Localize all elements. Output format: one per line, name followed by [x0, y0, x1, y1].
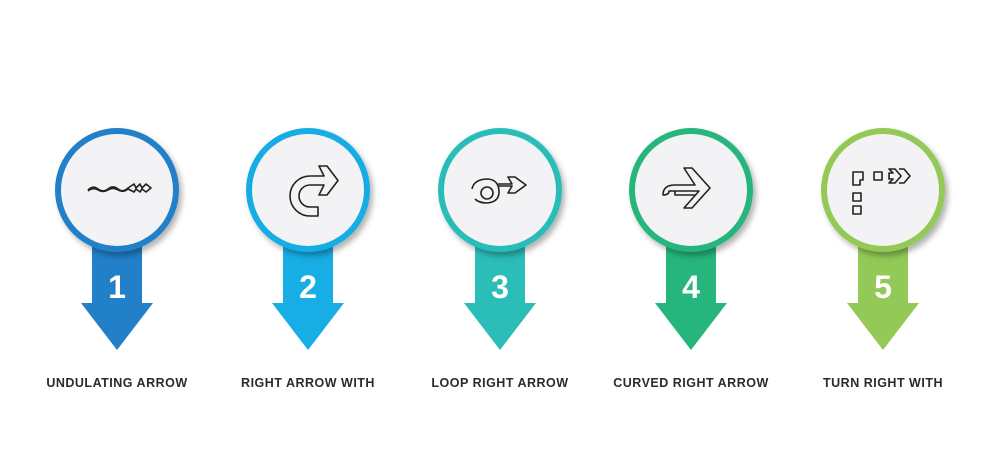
step 5	[821, 128, 945, 390]
icon: loop right arrow	[472, 177, 526, 203]
icon: curved right arrow	[663, 168, 710, 208]
circle 2	[246, 128, 370, 252]
label 2: RIGHT ARROW WITH	[241, 376, 375, 390]
number 5: 5	[874, 269, 892, 305]
step 1	[46, 128, 188, 390]
step 4	[613, 128, 769, 390]
label 3: LOOP RIGHT ARROW	[431, 376, 569, 390]
arrow 2	[272, 240, 344, 350]
arrow 4	[655, 240, 727, 350]
label 1: UNDULATING ARROW	[46, 376, 188, 390]
icon: turn right with squares	[853, 169, 910, 214]
arrow 3	[464, 240, 536, 350]
circle 5	[821, 128, 945, 252]
arrow 1	[81, 240, 153, 350]
step 2	[241, 128, 375, 390]
label 5: TURN RIGHT WITH	[823, 376, 943, 390]
circle 4	[629, 128, 753, 252]
step 3	[431, 128, 569, 390]
arrow 5	[847, 240, 919, 350]
circle 1	[55, 128, 179, 252]
number 3: 3	[491, 269, 509, 305]
circle 3	[438, 128, 562, 252]
label 4: CURVED RIGHT ARROW	[613, 376, 769, 390]
icon: right arrow with curve	[290, 166, 338, 216]
icon: undulating arrow	[88, 184, 151, 192]
number 1: 1	[108, 269, 126, 305]
number 2: 2	[299, 269, 317, 305]
number 4: 4	[682, 269, 700, 305]
